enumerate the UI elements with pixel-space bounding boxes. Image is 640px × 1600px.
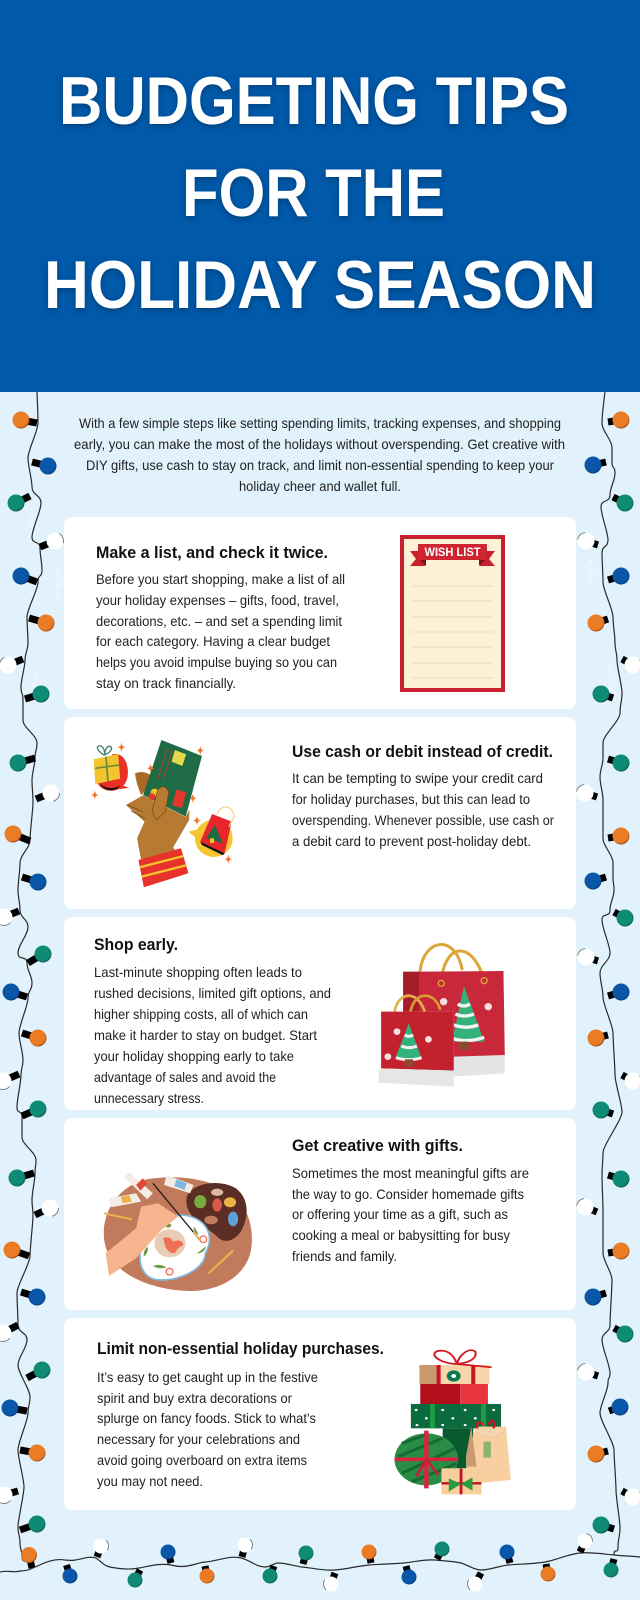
light string: left: [0, 392, 67, 1568]
intro text: With a few simple steps like setting spending limits, tracking expenses, and shopping: [79, 415, 561, 431]
text: make a list: stay on track financially.: [96, 675, 236, 691]
text: use cash: [292, 770, 554, 849]
text: make a list: Before you start shopping, make a list of all: [96, 571, 345, 587]
heading: make a list: Make a list, and check it twice.: [96, 543, 328, 562]
header banner: [0, 0, 640, 392]
text: get creative: or offering your time as a gift, such as: [292, 1206, 508, 1222]
text: shop early: [94, 964, 331, 1106]
heading: limit purchases: Limit non-essential holiday purchases.: [97, 1339, 384, 1358]
text: shop early: rushed decisions, limited gift options, and: [94, 985, 331, 1001]
icon: shopping bags: [378, 945, 505, 1087]
text: limit purchases: It’s easy to get caught up in the festive: [97, 1369, 318, 1385]
text: make a list: your holiday expenses – gifts, food, travel,: [96, 592, 339, 608]
heading: shop early: Shop early.: [94, 935, 178, 954]
text: shop early: advantage of sales and avoid the: [94, 1069, 276, 1085]
text: shop early: higher shipping costs, all of which can: [94, 1006, 308, 1022]
title: FOR THE: [182, 155, 445, 231]
text: use cash: overspending. Whenever possible, use cash or: [292, 812, 554, 828]
text: shop early: make it harder to stay on budget. Start: [94, 1027, 317, 1043]
title: HOLIDAY SEASON: [44, 247, 596, 323]
icon: hand holding credit card: [91, 740, 234, 887]
text: get creative: the way to go. Consider homemade gifts: [292, 1186, 524, 1202]
text: use cash: for holiday purchases, but this can lead to: [292, 791, 530, 807]
title: BUDGETING TIPS: [59, 63, 569, 139]
icon: stack of gifts: [395, 1350, 511, 1494]
text: make a list: for each category. Having a clear budget: [96, 633, 330, 649]
text: limit purchases: [97, 1369, 318, 1489]
text: get creative: friends and family.: [292, 1248, 397, 1264]
heading: get creative: Get creative with gifts.: [292, 1136, 463, 1155]
text: limit purchases: necessary for your celebrations and: [97, 1431, 300, 1447]
intro text: DIY gifts, use cash to stay on track, and limit non-essential spending to keep your: [86, 457, 554, 473]
panel: limit purchases: [64, 1318, 576, 1510]
panel: make a list: [64, 517, 576, 709]
intro text: [74, 415, 565, 494]
text: use cash: It can be tempting to swipe your credit card: [292, 770, 543, 786]
text: make a list: decorations, etc. – and set a spending limit: [96, 613, 342, 629]
text: limit purchases: spirit and buy extra decorations or: [97, 1390, 292, 1406]
intro text: early, you can make the most of the holidays without overspending. Get creative with: [74, 436, 565, 452]
title: [44, 63, 596, 323]
panel: use cash or debit: [64, 717, 576, 909]
light string: bottom: [0, 1532, 640, 1595]
text: make a list: helps you avoid impulse buying so you can: [96, 654, 337, 670]
text: limit purchases: splurge on fancy foods. Stick to what’s: [97, 1410, 316, 1426]
text: get creative: Sometimes the most meaningful gifts are: [292, 1165, 529, 1181]
text: get creative: [292, 1165, 529, 1264]
snowflakes background: [18, 499, 624, 701]
text: use cash: a debit card to prevent post-holiday debt.: [292, 833, 531, 849]
text: shop early: your holiday shopping early to take: [94, 1048, 294, 1064]
text: get creative: cooking a meal or babysitting for busy: [292, 1227, 510, 1243]
text: shop early: Last-minute shopping often leads to: [94, 964, 302, 980]
text: limit purchases: you may not need.: [97, 1473, 203, 1489]
text: shop early: unnecessary stress.: [94, 1090, 204, 1106]
text: limit purchases: avoid going overboard on extra items: [97, 1452, 307, 1468]
heading: use cash: Use cash or debit instead of credit.: [292, 742, 553, 761]
icon: wish list: WISH LIST: [424, 547, 480, 559]
icon: painting a plate: [104, 1172, 252, 1291]
panel: shop early: [64, 917, 576, 1110]
panel: get creative: [64, 1118, 576, 1310]
intro text: holiday cheer and wallet full.: [239, 478, 401, 494]
page background: [0, 392, 640, 1600]
icon: wish list: [402, 537, 503, 690]
light string: right: [575, 392, 640, 1555]
text: make a list: [96, 571, 345, 691]
